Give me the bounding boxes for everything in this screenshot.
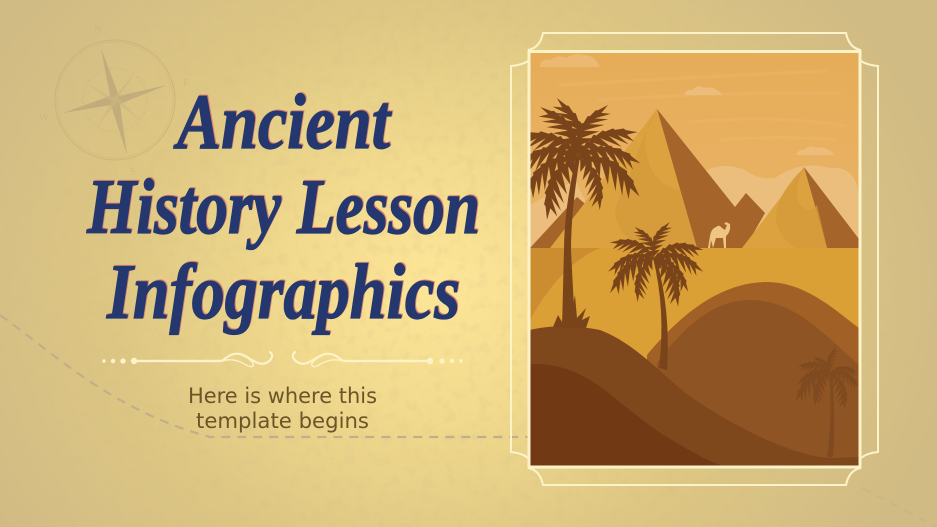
- icon: compass rose: E: [183, 77, 190, 89]
- small palm: [602, 220, 705, 370]
- title: [86, 78, 480, 335]
- ornamental divider: [102, 352, 463, 367]
- subtitle: template begins: [196, 409, 369, 433]
- dashed route line continuation: [862, 488, 937, 527]
- sky: [530, 53, 858, 204]
- title: Infographics: [106, 248, 460, 335]
- left dune: [530, 248, 600, 320]
- small back pyramid: [735, 193, 765, 248]
- main pyramid: [550, 109, 742, 248]
- large palm: [530, 98, 640, 328]
- sky streaks: [695, 70, 826, 76]
- back dune: [647, 282, 858, 368]
- middle dune: [657, 300, 859, 466]
- right pyramid: [742, 167, 859, 248]
- clouds: [530, 54, 859, 250]
- camel: [708, 222, 730, 248]
- icon: compass rose: S: [130, 166, 136, 178]
- illustration: desert with pyramids and palms: [513, 53, 862, 466]
- icon: compass rose: N: [94, 24, 102, 36]
- darkest foreground dune: [530, 364, 723, 466]
- title: History Lesson: [86, 163, 480, 250]
- subtitle: [188, 384, 377, 433]
- sand ground: [530, 248, 859, 368]
- illustration border: [529, 52, 860, 467]
- icon: compass rose: W: [39, 112, 50, 124]
- title: Ancient: [173, 78, 392, 165]
- faint palm: [796, 347, 858, 457]
- icon: compass rose: [39, 24, 190, 178]
- subtitle: Here is where this: [188, 384, 377, 408]
- small left pyramid: [530, 197, 590, 248]
- decorative frame: [511, 33, 878, 485]
- front dune: [530, 326, 859, 466]
- dashed route line: [0, 315, 530, 437]
